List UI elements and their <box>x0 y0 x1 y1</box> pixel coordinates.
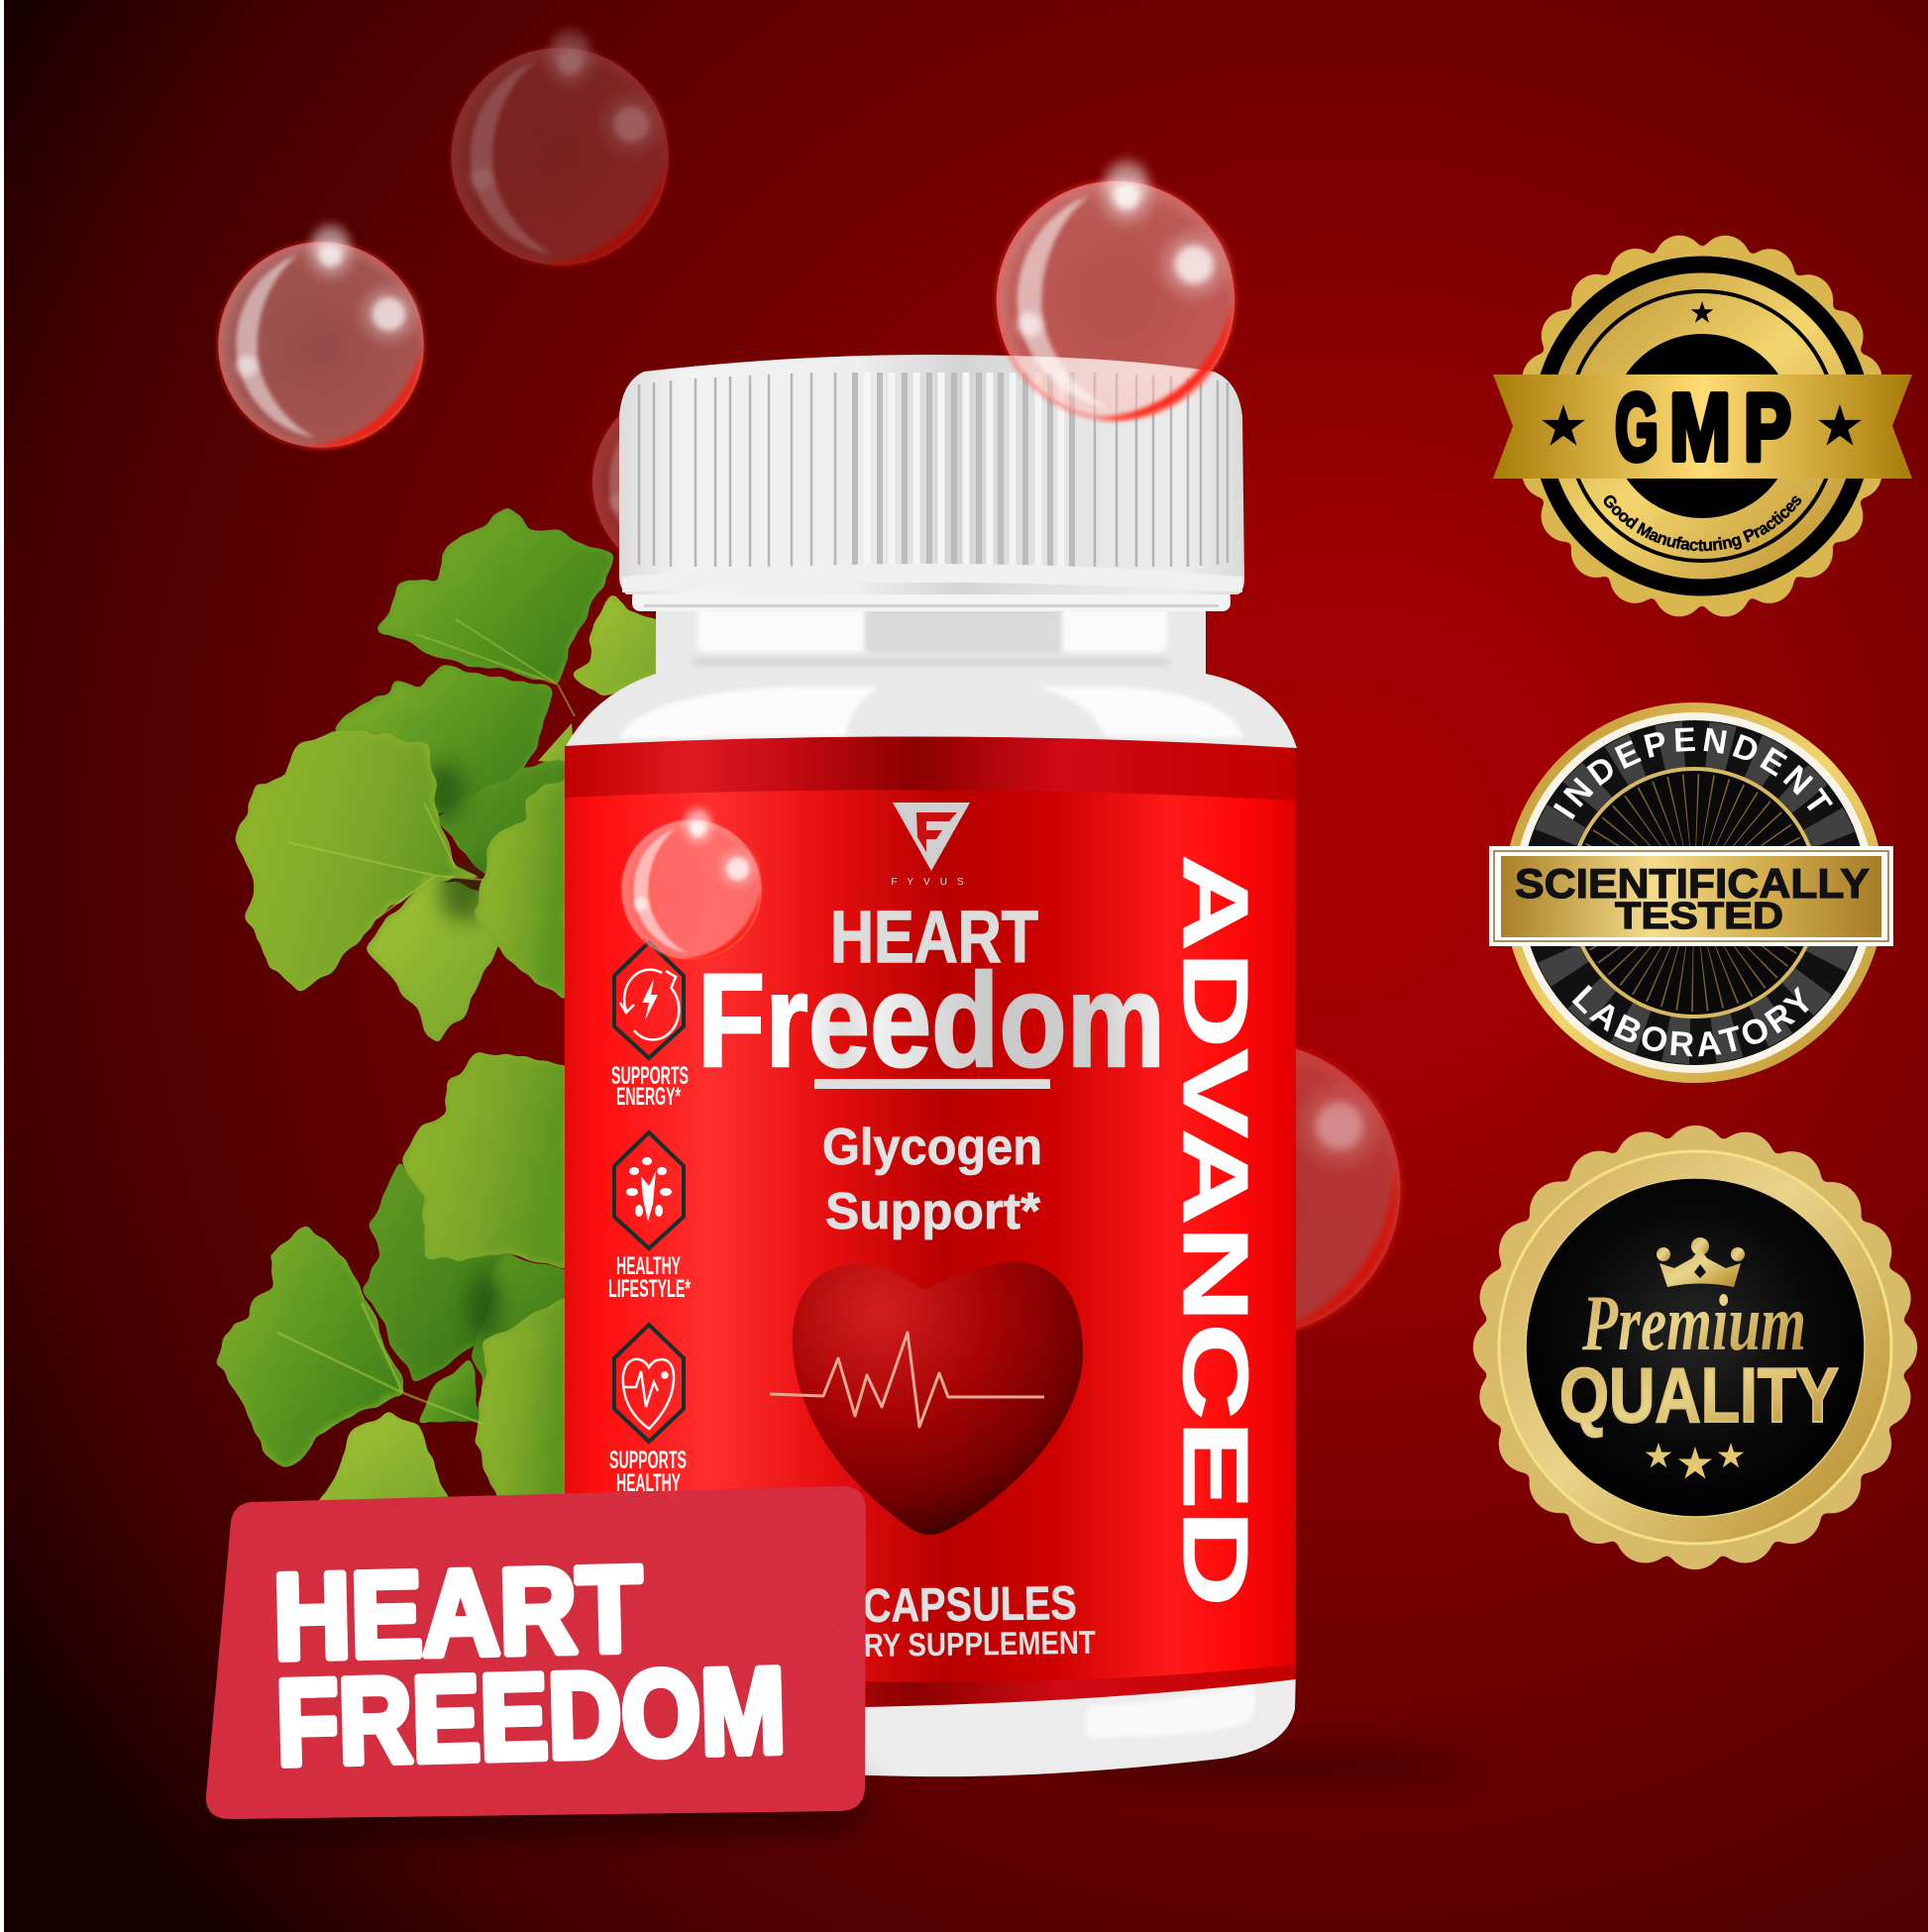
benefit: supports healthy: HEALTHY <box>616 1469 681 1497</box>
tag text: FREEDOM <box>274 1643 787 1790</box>
badge: GMP <box>1493 236 1912 616</box>
icon: lifestyle tree <box>626 1157 672 1222</box>
logo mark <box>891 803 974 888</box>
leaf: top <box>381 509 611 716</box>
bubble: over label <box>621 807 762 960</box>
label body <box>565 736 1296 1708</box>
bottle <box>565 355 1297 1776</box>
base highlight <box>1085 1684 1255 1738</box>
leaf: left <box>216 1229 482 1465</box>
top star <box>1691 301 1713 323</box>
capsule count: CAPSULES <box>862 1577 1077 1633</box>
crown icon <box>1657 1237 1745 1287</box>
tag text <box>272 1542 787 1790</box>
benefit: supports healthy: SUPPORTS <box>609 1447 687 1474</box>
supplement line: RY SUPPLEMENT <box>864 1624 1096 1664</box>
tag text: HEART <box>272 1542 643 1684</box>
cap centre ribs <box>855 373 1072 567</box>
product title: HEART <box>830 896 1038 978</box>
leaf: dark behind <box>364 1162 505 1380</box>
cap <box>619 355 1244 594</box>
badge: premium quality <box>1492 1144 1898 1551</box>
ring stripes <box>1546 744 1843 1041</box>
heart illustration <box>770 1262 1083 1535</box>
cap rib highlights <box>867 373 1061 567</box>
neck collar <box>632 590 1231 611</box>
leaf: front right lower <box>478 1298 567 1516</box>
product title <box>697 896 1165 1240</box>
bubble: behind cap <box>592 370 785 579</box>
icon: heart runner <box>622 1359 674 1429</box>
rating stars <box>1646 1443 1744 1479</box>
leaf: small by neck <box>575 594 657 696</box>
sunburst rays <box>1635 833 1754 952</box>
leaf: lower behind <box>369 875 497 1042</box>
benefit: supports energy: SUPPORTS <box>611 1062 689 1090</box>
leaf shadow: centre <box>440 862 487 921</box>
tag shadow <box>228 1783 862 1833</box>
seal edge <box>1537 256 1868 596</box>
ginkgo leaves: lower cluster <box>216 1053 567 1516</box>
GMP text: G <box>1615 375 1659 481</box>
seal edge <box>1492 1144 1898 1551</box>
benefit: supports energy <box>611 942 689 1111</box>
bubble: upper left <box>218 224 424 448</box>
leaf: mid right <box>473 1253 567 1393</box>
label main panel <box>565 790 1296 1682</box>
leaf: back left <box>334 666 552 811</box>
bubble: right of bottle <box>1076 991 1428 1362</box>
leaf: bottom <box>319 1415 453 1516</box>
ring text: INDEPENDENT <box>1553 727 1833 820</box>
product title: Support* <box>825 1183 1041 1240</box>
badge: scientifically tested: TESTED <box>1615 896 1783 937</box>
ginkgo leaves: upper cluster <box>240 509 657 1042</box>
logo mark: FYVUS <box>891 877 974 888</box>
floor shadow <box>1070 1750 1486 1781</box>
benefit: supports healthy <box>609 1325 687 1497</box>
benefit: healthy lifestyle: LIFESTYLE* <box>608 1275 691 1303</box>
GMP text <box>1615 375 1791 481</box>
GMP text: M <box>1669 375 1731 481</box>
neck <box>565 590 1297 748</box>
icon: energy <box>620 970 679 1039</box>
benefit: supports energy: ENERGY* <box>616 1083 681 1111</box>
leaf: big left <box>240 730 483 987</box>
badge: scientifically tested <box>1489 702 1893 1083</box>
leaf: top right <box>406 1053 567 1268</box>
product title: Glycogen <box>822 1119 1042 1176</box>
banner <box>1489 846 1893 946</box>
product title: Freedom <box>697 947 1165 1095</box>
benefit: healthy lifestyle: HEALTHY <box>616 1252 681 1280</box>
leaf: small middle <box>416 1361 482 1424</box>
ribbon <box>1493 375 1912 479</box>
benefit: healthy lifestyle <box>608 1132 691 1303</box>
ribbon stars <box>1542 404 1585 446</box>
quality text: QUALITY <box>1559 1351 1839 1439</box>
bottle base <box>565 1669 1296 1776</box>
leaf shadow: lower <box>468 1273 503 1342</box>
vertical heading: ADVANCED <box>1164 854 1267 1607</box>
cap ribs <box>639 373 1228 567</box>
cap rim <box>622 564 1242 592</box>
badge: scientifically tested: LABORATORY <box>1571 985 1809 1056</box>
bubble: top centre <box>451 29 669 266</box>
leaf: back mid <box>436 764 567 875</box>
ecg line <box>770 1333 1044 1427</box>
shoulder highlights <box>619 687 880 738</box>
premium text: Premium <box>1581 1280 1806 1367</box>
leaf: front right <box>479 777 567 1001</box>
neck highlights <box>697 604 866 652</box>
leaf: small behind shoulder <box>538 723 575 765</box>
leaf shadow: behind big leaf <box>422 763 466 822</box>
arc text: Good Manufacturing Practices <box>1603 495 1801 551</box>
bubble: over cap <box>997 161 1234 419</box>
product name tag <box>206 1486 866 1819</box>
GMP text: P <box>1744 375 1791 481</box>
badge: scientifically tested: SCIENTIFICALLY <box>1515 860 1870 907</box>
